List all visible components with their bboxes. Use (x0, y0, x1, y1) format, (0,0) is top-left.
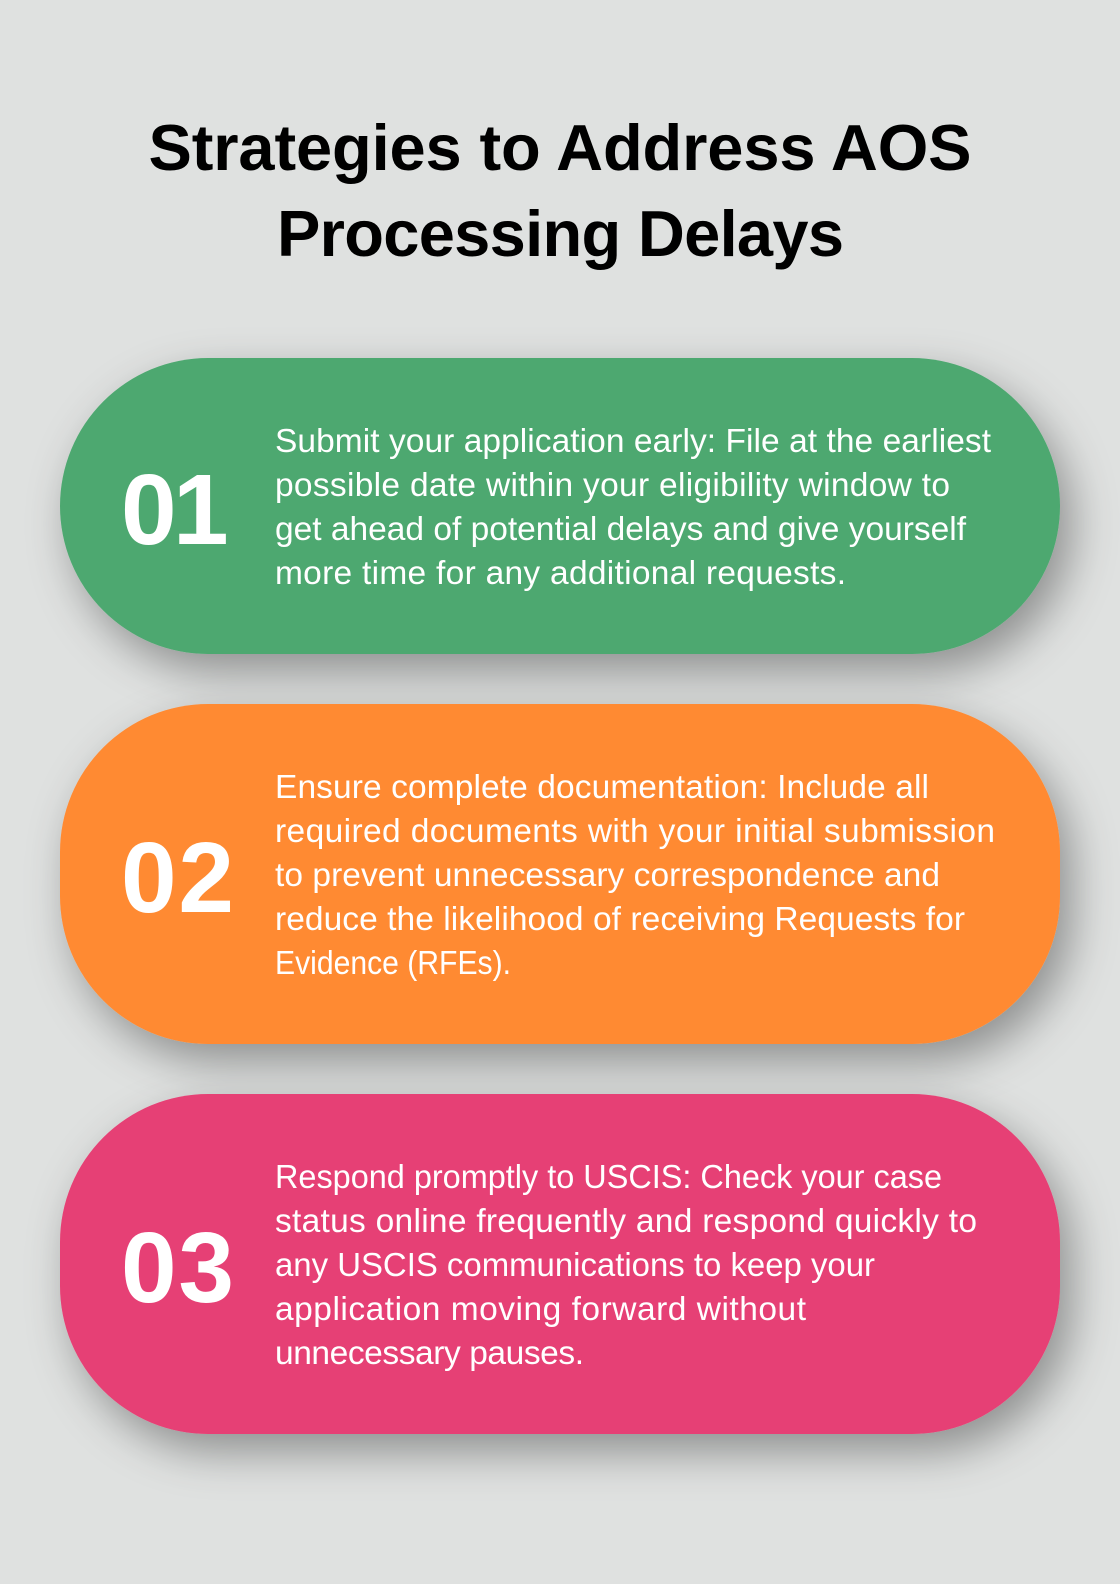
title (148, 111, 972, 270)
text: step 02 description: to prevent unnecessary correspondence and (275, 857, 940, 894)
text: step 02 description (275, 769, 995, 982)
text: step 01 description: get ahead of potential delays and give yourself (275, 511, 967, 548)
number 03: 03 (121, 1212, 234, 1324)
text: step 01 description: Submit your application early: File at the earliest (275, 423, 992, 460)
text: step 03 description: unnecessary pauses. (275, 1335, 584, 1372)
text: step 01 description: more time for any additional requests. (275, 555, 846, 592)
title: Strategies to Address AOS (148, 111, 972, 184)
text: step 03 description: status online frequently and respond quickly to (275, 1203, 977, 1240)
text: step 02 description: Ensure complete documentation: Include all (275, 769, 929, 806)
text: step 02 description: required documents with your initial submission (275, 813, 995, 850)
number 02: 02 (121, 822, 234, 934)
text: step 01 description: possible date within your eligibility window to (275, 467, 950, 504)
text: step 03 description: any USCIS communications to keep your (275, 1247, 875, 1284)
panel: step 03 (60, 1094, 1060, 1434)
text: step 02 description: reduce the likelihood of receiving Requests for (275, 901, 965, 938)
panel: step 01 (60, 358, 1060, 654)
text: step 02 description: Evidence (RFEs). (275, 945, 511, 982)
text: step 03 description: Respond promptly to USCIS: Check your case (275, 1159, 942, 1196)
title: Processing Delays (277, 197, 844, 270)
text: step 03 description (275, 1159, 977, 1372)
panel: step 02 (60, 704, 1060, 1044)
text: step 01 description (275, 423, 992, 592)
number 01: 01 (121, 454, 229, 566)
text: step 03 description: application moving forward without (275, 1291, 807, 1328)
